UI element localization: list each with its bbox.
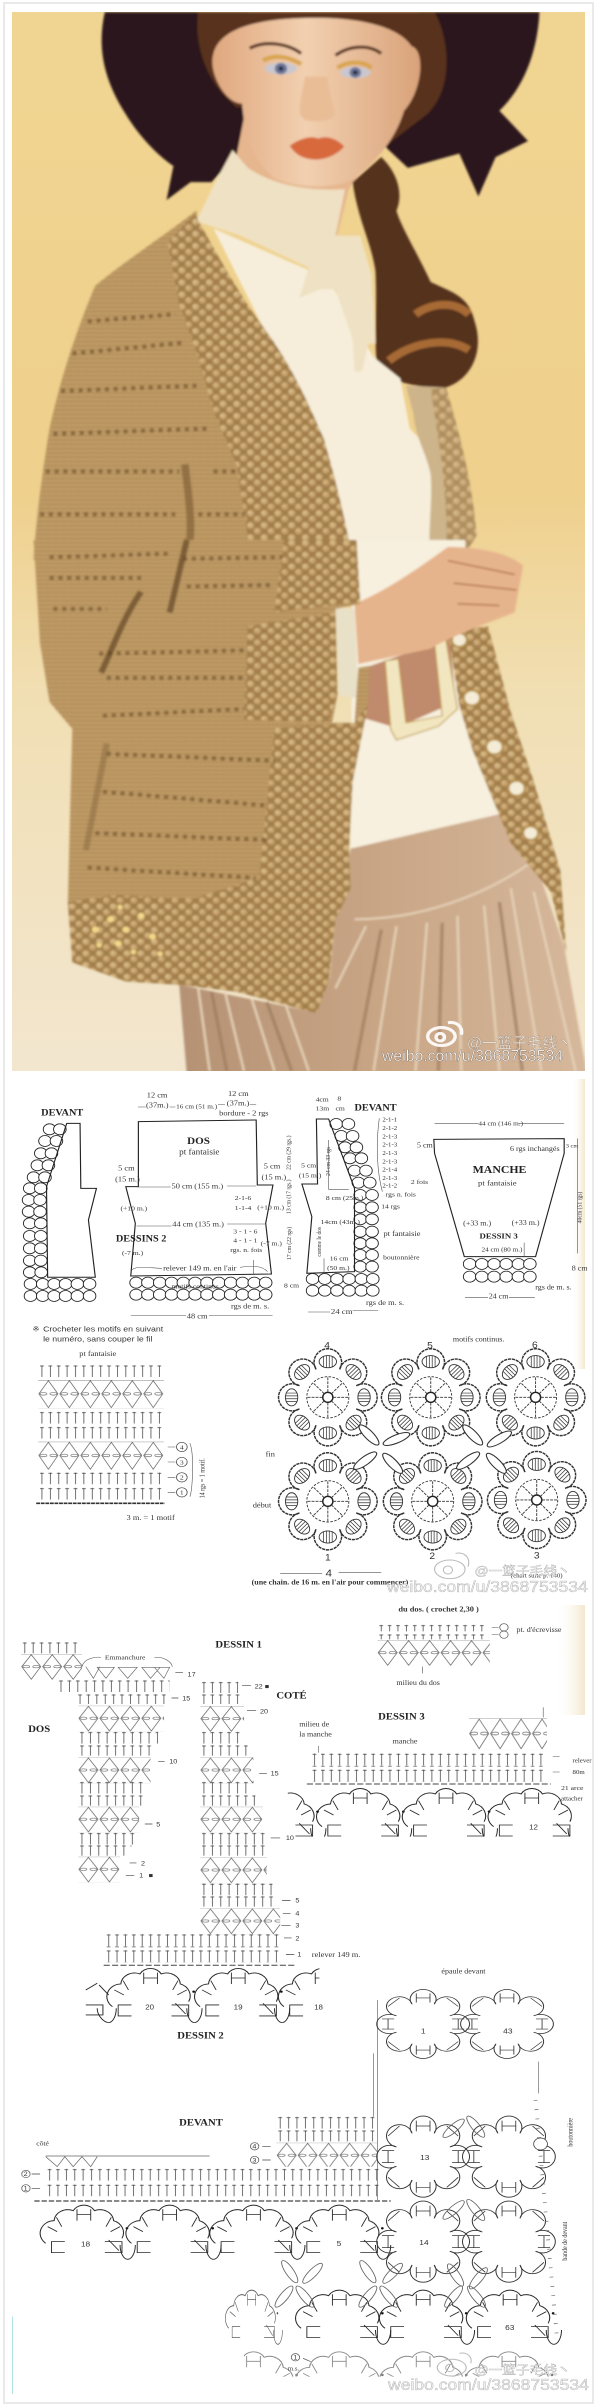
photo artwork softened xyxy=(34,12,587,1074)
labels: 6 rgs inchangés xyxy=(510,1144,560,1153)
motif numbers: 18 xyxy=(314,2003,323,2011)
vertical measures: 17 cm (22 rgs) xyxy=(286,1227,293,1260)
motif numbers xyxy=(81,2027,515,2332)
crochet hook note: du dos. ( crochet 2,30 ) xyxy=(398,1605,479,1613)
dimensions and labels: 5 cm xyxy=(118,1164,135,1173)
sleeve shadow xyxy=(185,464,191,560)
motifs xyxy=(306,1118,379,1296)
outline xyxy=(47,1123,96,1277)
dimensions and labels: 4 - 1 - 1 xyxy=(233,1237,258,1245)
COTE row numbers: 22 ■ xyxy=(255,1684,269,1690)
COTE row numbers: 1 xyxy=(297,1952,302,1958)
motifs: middle grid xyxy=(296,2116,555,2282)
labels: pt fantaisie xyxy=(478,1179,517,1187)
weibo icon on photo xyxy=(428,1022,462,1045)
right cardigan band lower xyxy=(448,626,566,952)
note text: Crocheter les motifs en suivant xyxy=(43,1325,164,1333)
width value: 4 xyxy=(326,1568,332,1579)
tee lower xyxy=(351,540,511,850)
DOS row numbers: 10 xyxy=(169,1759,178,1765)
motif numbers: 3 xyxy=(534,1551,540,1561)
cote label: côté xyxy=(36,2140,49,2147)
watermark bottom: weibo.com/u/3868753534 xyxy=(387,2377,589,2394)
lips xyxy=(290,137,344,160)
COTE row numbers: 20 xyxy=(260,1709,268,1715)
labels: rgs n. fois xyxy=(386,1191,416,1199)
note text: ※ xyxy=(32,1325,40,1333)
COTE stitch rows xyxy=(104,1682,297,1965)
diagrams background tint upper xyxy=(572,1079,585,1369)
motif numbers: 20 xyxy=(145,2003,154,2011)
labels: comme le dos xyxy=(317,1226,323,1257)
note text xyxy=(32,1325,164,1343)
relever label: relever 149 m. xyxy=(312,1950,360,1959)
motifs xyxy=(463,1258,536,1282)
labels: 14 rgs xyxy=(381,1203,400,1211)
dimensions and labels: 16 cm (51 m.) xyxy=(176,1104,217,1111)
fin and debut labels: fin xyxy=(266,1450,275,1458)
labels: 24 cm xyxy=(489,1292,509,1301)
photo: model wearing crochet cardigan xyxy=(12,12,587,1074)
DOS heading: DOS xyxy=(28,1725,51,1735)
face xyxy=(212,18,420,187)
shaping stitch counts: 2-1-3 xyxy=(382,1175,397,1182)
motifs xyxy=(130,1277,272,1300)
COTE row numbers: 2 xyxy=(295,1936,300,1942)
DESSIN 3 labels: la manche xyxy=(299,1730,333,1738)
stitch chart: DESSIN 1 xyxy=(21,1624,592,2023)
dimensions and labels: (37m.) xyxy=(227,1099,250,1107)
labels: 4cm xyxy=(316,1096,329,1103)
right front schematic: DEVANT xyxy=(299,1095,428,1316)
motif numbers: 5 xyxy=(337,2239,342,2248)
heading: DEVANT xyxy=(41,1108,84,1118)
labels: pt fantaisie xyxy=(383,1229,421,1238)
DESSIN 3 labels: 80m xyxy=(573,1769,585,1776)
labels xyxy=(417,1121,588,1301)
dimensions and labels: rgs de m. s. xyxy=(231,1302,269,1311)
motif 3 xyxy=(487,1451,586,1549)
DOS row numbers: 2 xyxy=(141,1861,145,1868)
sleeve xyxy=(34,540,360,729)
shaping stitch counts: 2-1-2 xyxy=(382,1125,397,1132)
dimensions and labels: 12 cm xyxy=(147,1091,167,1100)
buttons xyxy=(452,633,538,840)
heading: MANCHE xyxy=(473,1165,526,1176)
motif 4 xyxy=(279,1349,377,1446)
COTE row numbers: 4 xyxy=(295,1911,300,1917)
dimensions and labels: 50 cm (155 m.) xyxy=(172,1182,224,1191)
labels: 44 cm (146 m.) xyxy=(478,1121,523,1128)
motifs: third row xyxy=(296,2290,562,2344)
DESSIN 3 labels xyxy=(299,1720,592,1831)
DOS row numbers: ■ xyxy=(149,1873,153,1880)
stitch rows xyxy=(36,1365,165,1503)
vertical measures: 13 cm (17 rgs.) xyxy=(285,1180,293,1214)
flower motif diagram xyxy=(252,1341,586,1586)
repeat width label: 3 m. = 1 motif xyxy=(127,1513,175,1522)
watermark bottom: @一篮子毛线丶 xyxy=(475,2363,571,2377)
side labels: bande de devant xyxy=(562,2222,569,2261)
DOS row numbers: 1 xyxy=(139,1873,143,1880)
sleeve bobble panels xyxy=(244,540,360,723)
dimensions and labels: 5 cm xyxy=(264,1162,280,1171)
COTE row numbers: 10 xyxy=(286,1835,294,1842)
watermark over motif chart xyxy=(386,1553,588,1596)
shaping stitch counts: 2-1-4 xyxy=(382,1167,398,1174)
braid highlight xyxy=(389,305,469,361)
joining loops xyxy=(351,1423,514,1476)
fingers xyxy=(448,561,517,606)
shaping stitch counts xyxy=(382,1117,398,1189)
belt buckle xyxy=(385,640,457,740)
DOS row numbers: 5 xyxy=(156,1822,161,1829)
DESSIN 3 labels: relever xyxy=(573,1758,592,1765)
bottom marker xyxy=(291,2354,311,2362)
guide lines xyxy=(308,1118,382,1312)
photo background xyxy=(12,12,585,1071)
labels: 13m xyxy=(316,1105,330,1113)
motif numbers: 63 xyxy=(505,2323,515,2332)
edge stitches xyxy=(536,2100,557,2333)
labels: (+33 m.) xyxy=(512,1218,540,1227)
guide arrows xyxy=(435,1123,578,1297)
row markers: 2 xyxy=(180,1474,184,1482)
neck xyxy=(236,118,358,236)
labels: boutonnière xyxy=(383,1254,420,1261)
fin and debut labels xyxy=(253,1450,275,1510)
row markers: 3 xyxy=(180,1459,184,1466)
sleeve schematic: MANCHE xyxy=(417,1121,588,1301)
stitch chart: pt fantaisie xyxy=(36,1341,588,1613)
motif numbers: 6 xyxy=(532,1341,538,1351)
shaping stitch counts: 2-1-3 xyxy=(382,1142,397,1149)
outline xyxy=(434,1139,564,1257)
labels: 8 cm xyxy=(572,1264,588,1273)
front band guide lines xyxy=(374,2000,539,2200)
outline xyxy=(302,1119,355,1273)
labels: (+33 m.) xyxy=(463,1219,492,1228)
DESSIN 3 label: DESSIN 3 xyxy=(480,1232,518,1240)
nose xyxy=(300,77,335,121)
pt ecrevisse chart: milieu du dos xyxy=(396,1678,440,1687)
shaping stitch counts: 2-1-2 xyxy=(382,1183,397,1189)
COTE row numbers xyxy=(242,1684,302,1958)
cardigan left front and sleeve xyxy=(32,210,271,560)
pt ecrevisse chart: pt. d'écrevisse xyxy=(517,1625,562,1634)
band bobbles xyxy=(431,387,477,560)
dimensions and labels: (+10 m.) xyxy=(257,1204,285,1211)
vertical measures xyxy=(284,1136,299,1289)
row markers: 4 xyxy=(252,2144,257,2151)
dimensions and labels: 48 cm xyxy=(187,1312,207,1320)
dimensions and labels: 3 - 1 - 6 xyxy=(233,1228,258,1235)
left lower arches xyxy=(225,2290,282,2344)
dimensions and labels: 12 cm xyxy=(228,1089,249,1098)
joining leaves xyxy=(272,2114,490,2309)
motif numbers: 2 xyxy=(429,1552,435,1562)
motif numbers: 18 xyxy=(81,2240,91,2249)
dimensions and labels: bordure - 2 rgs xyxy=(219,1109,269,1117)
DESSIN 3 heading: DESSIN 3 xyxy=(378,1712,425,1722)
labels xyxy=(299,1095,428,1316)
watermark over motif chart: @一篮子毛线丶 xyxy=(475,1564,571,1578)
width arrow xyxy=(280,1571,381,1574)
COTE heading: COTÉ xyxy=(276,1690,307,1701)
motif numbers: 43 xyxy=(503,2027,513,2035)
hair top xyxy=(197,12,447,146)
watermark bottom xyxy=(387,2353,589,2394)
dimensions and labels: relever 149 m. en l'air xyxy=(163,1264,237,1273)
DESSIN 3 labels: attacher xyxy=(561,1796,584,1803)
side labels: boutonnière xyxy=(567,2118,575,2147)
sleeve shadows xyxy=(86,540,187,850)
DESSINS 2 heading: DESSINS 2 xyxy=(116,1234,167,1244)
shaping stitch counts: 2-1-3 xyxy=(382,1134,397,1140)
hand xyxy=(355,547,523,664)
labels: 40cm (51 rgs) xyxy=(576,1192,583,1223)
loop left of motif 20 xyxy=(86,1983,116,2023)
white tee xyxy=(213,229,433,560)
dimensions and labels: (15 m.) xyxy=(262,1173,287,1181)
body bobble panel xyxy=(68,706,368,1013)
lace holes hem xyxy=(92,905,163,956)
lace rows on sleeve xyxy=(39,312,245,518)
heading: DEVANT xyxy=(355,1103,397,1113)
pt ecrevisse chart xyxy=(377,1624,562,1687)
side labels xyxy=(288,2118,575,2372)
DOS stitch rows xyxy=(21,1642,172,1883)
labels: 2 fois xyxy=(411,1178,428,1186)
schematic panel xyxy=(22,1089,588,1344)
labels: 8 cm (25m.) xyxy=(326,1194,364,1202)
hat xyxy=(102,12,539,200)
eyes xyxy=(263,57,372,78)
row markers: 1 xyxy=(24,2186,28,2193)
dimensions and labels xyxy=(115,1089,287,1320)
left front schematic: DEVANT xyxy=(22,1108,96,1301)
right cardigan band xyxy=(406,386,477,560)
fin and debut labels: début xyxy=(253,1501,272,1510)
buttonhole xyxy=(534,2138,547,2150)
left teal edge xyxy=(11,2317,14,2394)
outline xyxy=(126,1120,273,1276)
motif 2 xyxy=(383,1453,482,1550)
DEVANT heading: DEVANT xyxy=(179,2118,223,2128)
dimensions and labels: 1-1-4 xyxy=(235,1204,252,1212)
dimensions and labels: (15 m.) xyxy=(115,1175,140,1183)
motifs: hem row xyxy=(40,2205,305,2259)
labels: rgs de m. s. xyxy=(535,1283,572,1291)
labels: 24 cm (80 m.) xyxy=(481,1247,522,1253)
COTE row numbers: 15 xyxy=(271,1771,279,1777)
motif 5 xyxy=(381,1349,480,1446)
DESSIN 3 labels: 21 arce xyxy=(561,1784,583,1792)
DESSIN 3 labels: 12 xyxy=(529,1823,538,1831)
bottom partial motifs xyxy=(210,2352,560,2406)
bottom marker: 1 xyxy=(294,2355,298,2361)
diagrams background tint middle xyxy=(555,1605,585,1715)
dimensions and labels: (-7 m.) xyxy=(261,1240,283,1247)
caption: (une chain. de 16 m. en l'air pour commencer) xyxy=(252,1578,409,1586)
motif numbers: 13 xyxy=(420,2153,430,2162)
COTE row numbers: 5 xyxy=(295,1898,300,1905)
DOS stitch label: pt fantaisie xyxy=(179,1147,220,1157)
bobble strip along the neck xyxy=(168,214,353,560)
labels: (50 m.) xyxy=(327,1264,350,1272)
DESSIN 3 labels: manche xyxy=(393,1737,418,1745)
row markers xyxy=(22,2143,271,2193)
DOS heading: DOS xyxy=(187,1137,210,1147)
dimensions and labels: 2-1-6 xyxy=(235,1194,252,1202)
braid xyxy=(353,157,478,388)
DESSIN 2 heading: DESSIN 2 xyxy=(177,2031,224,2041)
motif numbers xyxy=(324,1341,540,1563)
labels: 5 cm xyxy=(417,1141,433,1150)
width arrows xyxy=(131,1105,273,1316)
motif numbers: 4 xyxy=(324,1341,331,1351)
lower body of model xyxy=(34,540,587,1074)
watermark handle on photo: @一篮子毛线丶 xyxy=(467,1034,572,1052)
watermark over motif chart: weibo.com/u/3868753534 xyxy=(386,1579,588,1596)
back schematic: DOS xyxy=(115,1089,287,1320)
vertical measures: 8 cm xyxy=(284,1282,299,1289)
shoulder label: épaule devant xyxy=(441,1967,487,1975)
row markers xyxy=(168,1442,193,1497)
labels: 8 xyxy=(337,1095,342,1103)
dimensions and labels: rgs. n. fois xyxy=(230,1246,263,1254)
side labels: m.s. xyxy=(288,2366,300,2372)
skirt pleats xyxy=(198,861,576,1071)
shaping stitch counts: 2-1-3 xyxy=(382,1159,397,1165)
motif numbers: 19 xyxy=(234,2003,243,2011)
motif 1 xyxy=(279,1453,377,1550)
row markers: 2 xyxy=(24,2171,28,2178)
motif 6 xyxy=(486,1349,585,1446)
cuff xyxy=(335,607,358,699)
motifs dessin 2 upper xyxy=(107,1968,374,2023)
labels: 14cm (43m.) xyxy=(321,1218,361,1226)
dimensions and labels: (+10 m.) xyxy=(120,1205,148,1213)
labels: (15 m.) xyxy=(299,1172,322,1179)
cardigan body xyxy=(66,665,370,903)
motif numbers xyxy=(145,2003,323,2011)
DEVANT stitch rows xyxy=(34,2117,391,2201)
lace rows sleeve and body xyxy=(50,554,282,878)
DOS stitch rows: Emmanchure xyxy=(105,1654,145,1662)
row markers: 3 xyxy=(252,2158,257,2164)
shaping stitch counts: 2-1-1 xyxy=(382,1117,397,1124)
motif numbers: 1 xyxy=(325,1553,331,1563)
labels: rgs de m. s. xyxy=(366,1298,404,1307)
row markers: 4 xyxy=(180,1444,184,1451)
flower panel label: motifs continus. xyxy=(453,1335,504,1344)
row markers: 1 xyxy=(180,1489,184,1497)
shaping stitch counts: 2-1-3 xyxy=(382,1150,397,1157)
dimensions and labels: (37m.) xyxy=(146,1101,169,1109)
dimensions and labels: motifs continus. xyxy=(172,1283,221,1291)
belt xyxy=(360,638,456,728)
labels: 5 cm xyxy=(301,1162,317,1169)
labels: 24 cm 33 rgs xyxy=(326,1146,332,1176)
DESSIN 3 labels: milieu de xyxy=(299,1720,330,1728)
note: (chart suite p. 140) xyxy=(511,1573,563,1580)
note text: le numéro, sans couper le fil xyxy=(43,1335,153,1343)
DOS row numbers: 17 xyxy=(188,1672,196,1679)
scarf and collar xyxy=(196,150,375,371)
skirt pleat shadows xyxy=(212,902,522,1071)
labels: 16 cm xyxy=(330,1255,349,1263)
eyebrows xyxy=(250,44,381,55)
motif numbers: 1 xyxy=(421,2027,426,2035)
chart title: pt fantaisie xyxy=(79,1349,117,1358)
labels: 24 cm xyxy=(331,1307,353,1316)
DESSIN 3 chart xyxy=(231,1707,583,1843)
dimensions and labels: 44 cm (135 m.) xyxy=(172,1220,224,1228)
stitch chart: DESSIN 2 and DEVANT xyxy=(13,1990,589,2406)
upper body of model xyxy=(34,12,539,560)
repeat labels: 14 rgs = 1 motif. xyxy=(199,1458,207,1498)
vertical measures: 22 cm (29 rgs.) xyxy=(285,1136,293,1170)
motif numbers: 14 xyxy=(419,2238,429,2247)
DESSIN 1 heading: DESSIN 1 xyxy=(215,1640,262,1650)
motifs: shoulder row xyxy=(377,1990,553,2058)
motif numbers: 5 xyxy=(427,1341,433,1351)
photo watermark url: weibo.com/u/3868753534 xyxy=(381,1048,563,1065)
COTE row numbers: 3 xyxy=(295,1923,300,1929)
labels: cm xyxy=(335,1105,345,1113)
DOS row numbers: 15 xyxy=(182,1696,190,1703)
DOS row numbers xyxy=(126,1672,196,1880)
labels: 3 cm xyxy=(566,1144,579,1149)
dimensions and labels: (-7 m.) xyxy=(122,1249,144,1257)
skirt xyxy=(179,812,587,1074)
motifs xyxy=(22,1124,96,1301)
